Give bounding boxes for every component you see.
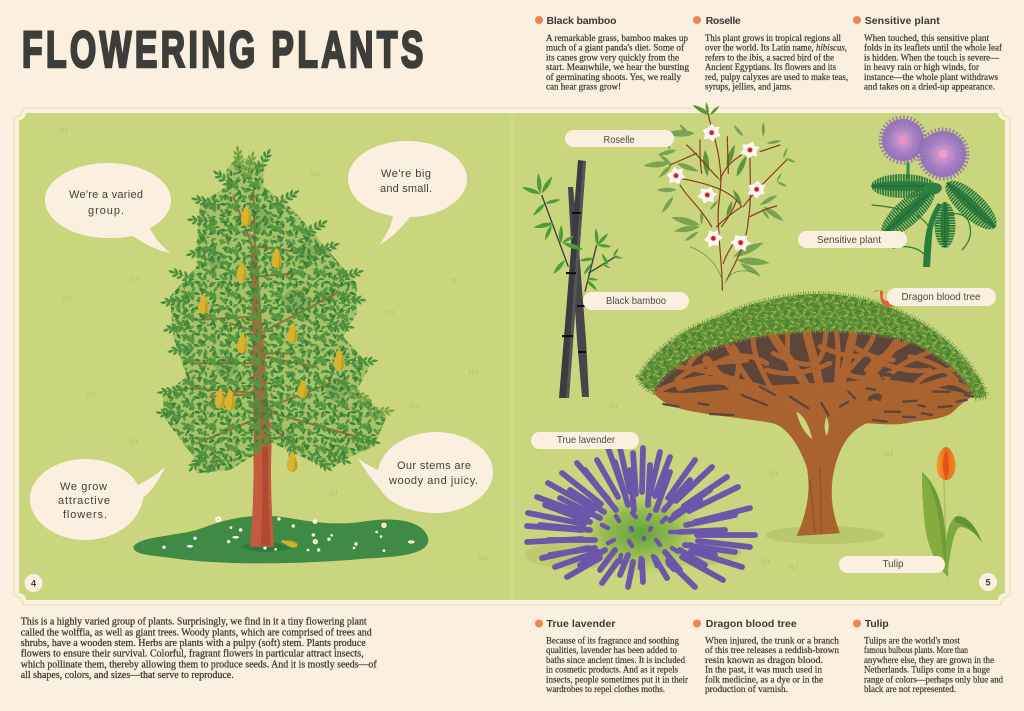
grass tufts <box>60 128 892 570</box>
illustration: ground under pear tree <box>133 516 428 563</box>
text block: Dragon blood tree: Dragon blood tree <box>706 618 797 630</box>
text block: True lavender: True lavender <box>546 618 616 630</box>
roselle flowers <box>666 124 767 256</box>
page number 4: 4 <box>31 578 36 588</box>
stem <box>872 163 970 267</box>
light slits through branches <box>797 412 812 439</box>
text block: True lavender: baths since ancient times. It is included <box>546 655 685 666</box>
text block: Dragon blood tree: production of varnish. <box>705 684 788 695</box>
red branches <box>190 190 357 450</box>
label: Tulip <box>839 556 945 573</box>
text block: Sensitive plant: Sensitive plant <box>865 15 940 27</box>
speech bubble: attractive flowers <box>30 459 165 540</box>
text block: Dragon blood tree: In the past, it was much used in <box>705 665 822 676</box>
text block: True lavender: Because of its fragrance and soothing <box>546 636 679 646</box>
illustration: tulip <box>922 447 982 577</box>
panel: illustration frame <box>14 108 1010 605</box>
text block: True lavender: in cosmetic products. And as it repels <box>546 665 678 676</box>
label: True lavender: True lavender <box>557 434 615 446</box>
text block: Sensitive plant: and takes on a dried-up appearance. <box>864 82 995 93</box>
text block: Dragon blood tree: resin known as dragon blood. <box>705 655 823 666</box>
text block: Tulip: Netherlands. Tulips come in a huge <box>864 665 990 676</box>
text block: Roselle: red, pulpy calyxes are used to make teas, <box>705 72 848 83</box>
text block: True lavender: insects, people sometimes put it in their <box>546 674 689 685</box>
lower dark slivers <box>663 374 973 422</box>
intro paragraph <box>21 617 377 681</box>
text block: Tulip: Tulips are the world's most <box>864 636 960 646</box>
illustration: roselle <box>643 102 796 290</box>
text block: Sensitive plant <box>853 15 1003 93</box>
label: Roselle: Roselle <box>604 134 635 146</box>
edge leaf sprigs <box>154 145 395 477</box>
text block: Sensitive plant: instance—the whole plant withdraws <box>864 72 998 83</box>
bamboo leaves <box>521 173 623 292</box>
speech bubble: varied group: group. <box>88 205 124 217</box>
text block: Sensitive plant: is hidden. When the touch is severe— <box>864 52 999 64</box>
speech bubble: attractive flowers: flowers. <box>63 509 107 521</box>
label: Black bamboo <box>583 292 689 310</box>
text block: Tulip: black are not represented. <box>864 684 956 695</box>
roselle stems <box>670 115 787 290</box>
intro paragraph: flowers to ensure their survival. Colorful, fragrant flowers in particular attract insects, <box>21 649 364 660</box>
title: FLOWERING PLANTS <box>22 22 423 79</box>
label: True lavender <box>531 432 639 449</box>
branches <box>660 330 968 427</box>
pears <box>198 206 345 549</box>
roselle leaves <box>643 102 796 277</box>
text block: Black bamboo: its canes grow very quickly from the <box>546 52 679 64</box>
page number 5: 5 <box>985 578 991 588</box>
text block: Sensitive plant: When touched, this sensitive plant <box>864 33 989 44</box>
text block: Black bamboo: Black bamboo <box>546 15 616 27</box>
text block: True lavender: wardrobes to repel clothes moths. <box>546 684 665 695</box>
intro paragraph: all shapes, colors, and sizes—that serve to reproduce. <box>21 670 234 681</box>
text block: Sensitive plant: in heavy rain or high winds, for <box>864 62 980 73</box>
intro paragraph: shrubs, have a wooden stem. Herbs are plants with a pulpy (soft) stem. Plants produce <box>21 638 366 649</box>
text block: Roselle: This plant grows in tropical regions all <box>705 33 841 44</box>
speech bubble: woody and juicy: Our stems are <box>397 460 471 472</box>
text block: True lavender: qualities, lavender has been added to <box>546 645 677 656</box>
text block: Roselle <box>693 15 848 93</box>
text block: Roselle: over the world. Its Latin name, hibiscus, <box>705 43 847 54</box>
speech bubble: attractive flowers: We grow <box>60 481 107 493</box>
text block: Dragon blood tree <box>693 618 839 695</box>
page number 5 <box>979 573 997 591</box>
label: Dragon blood tree: Dragon blood tree <box>902 291 981 303</box>
speech bubble: big and small: and small. <box>380 183 432 195</box>
speech bubble: attractive flowers: attractive <box>58 495 110 507</box>
intro paragraph: which pollinate them, thereby allowing them to produce seeds. And it is mostly seeds—of <box>21 659 377 670</box>
label: Tulip: Tulip <box>882 558 904 570</box>
text block: Black bamboo: can hear grass grow! <box>546 82 621 93</box>
text block: Black bamboo: A remarkable grass, bamboo makes up <box>546 33 688 44</box>
label: Roselle <box>565 130 674 147</box>
label: Black bamboo: Black bamboo <box>606 295 666 307</box>
bamboo canes <box>559 160 589 398</box>
speech bubble: big and small <box>348 141 467 245</box>
intro paragraph: called the wolffia, as well as giant trees. Woody plants, which are comprised of trees and <box>21 627 372 638</box>
text block: Tulip <box>853 618 1003 695</box>
text block: Dragon blood tree: When injured, the trunk or a branch <box>705 636 839 646</box>
dark gaps <box>653 331 973 395</box>
text block: Roselle: syrups, jellies, and jams. <box>705 82 792 93</box>
illustration: dragon blood tree <box>638 290 987 544</box>
text block: Roselle: refers to the ibis, a sacred bird of the <box>705 52 834 64</box>
label: Dragon blood tree <box>887 288 996 306</box>
text block: Black bamboo: much of a giant panda's diet. Some of <box>546 43 685 54</box>
label: Sensitive plant <box>798 231 907 248</box>
intro paragraph: This is a highly varied group of plants. Surprisingly, we find in it a tiny flowering plant <box>21 617 367 628</box>
speech bubble: big and small: We're big <box>381 168 431 180</box>
text block: Tulip: range of colors—perhaps only blue and <box>864 674 1003 685</box>
text block: Dragon blood tree: of this tree releases a reddish-brown <box>705 645 839 656</box>
text block: Tulip: Tulip <box>865 618 889 630</box>
text block: Sensitive plant: folds in its leaflets until the whole leaf <box>864 43 1003 54</box>
text block: Black bamboo: start. Meanwhile, we hear the bursting <box>546 62 689 73</box>
text block: Dragon blood tree: folk medicine, as a dye or in the <box>705 674 823 685</box>
canopy <box>638 294 987 398</box>
page number 4 <box>24 574 42 592</box>
illustration: sensitive plant <box>871 119 1004 267</box>
label: Sensitive plant: Sensitive plant <box>817 234 881 246</box>
foliage mass <box>163 155 387 473</box>
speech bubble: woody and juicy: woody and juicy. <box>388 475 478 487</box>
text block: Black bamboo: of germinating shoots. Yes, we really <box>546 72 681 83</box>
trunk and umbrella <box>652 329 975 536</box>
speech bubble: varied group <box>45 163 171 253</box>
text block: Roselle: Roselle <box>706 15 741 27</box>
text block: Tulip: famous bulbous plants. More than <box>864 645 968 656</box>
fronds <box>871 173 1004 248</box>
text block: Tulip: anywhere else, they are grown in the <box>864 655 994 666</box>
trunk <box>250 250 274 547</box>
flower heads <box>882 119 966 177</box>
illustration: true lavender <box>525 448 755 587</box>
illustration: black bamboo <box>521 160 623 398</box>
speech bubble: woody and juicy <box>358 432 493 513</box>
text block: Roselle: Ancient Egyptians. Its flowers and its <box>705 62 836 73</box>
bird <box>873 290 897 307</box>
text block: True lavender <box>535 618 689 695</box>
illustration: pear tree <box>154 145 395 549</box>
text block: Black bamboo <box>535 15 689 93</box>
speech bubble: varied group: We're a varied <box>69 189 143 201</box>
